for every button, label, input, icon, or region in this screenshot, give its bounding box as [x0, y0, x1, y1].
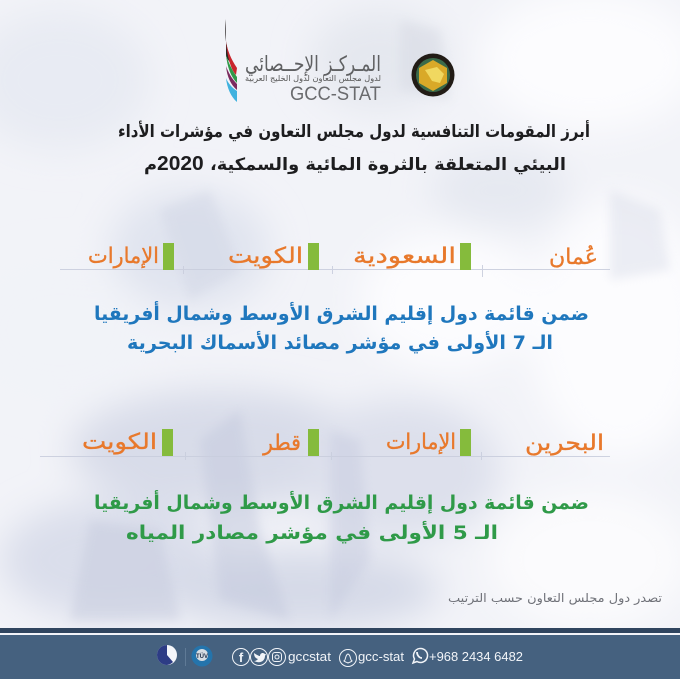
country: Qatar: قطر [262, 431, 301, 456]
handle: gccstat: gccstat [288, 649, 331, 664]
country row: marine fisheries [60, 243, 610, 277]
logo: GCC emblem [412, 54, 454, 96]
handle: gcc-stat: gcc-stat [358, 649, 404, 664]
logo: GCC-STAT wordmark: لدول مجلس التعاون لدول الخليج العربية [245, 74, 381, 83]
country: Kuwait: الكويت [228, 244, 303, 269]
country: UAE: الإمارات [386, 430, 456, 455]
country marker: UAE [163, 243, 174, 270]
icons: facebook twitter instagram: f [239, 650, 244, 665]
logo: GCC-STAT wordmark: GCC-STAT [290, 84, 381, 105]
country marker: UAE [460, 429, 471, 456]
country: UAE: الإمارات [88, 244, 159, 269]
logo: GCC-STAT wordmark [245, 52, 381, 105]
country: Kuwait: الكويت [82, 430, 157, 455]
icon: whatsapp [413, 648, 428, 663]
country marker: Saudi Arabia [460, 243, 471, 270]
country marker: Qatar [308, 429, 319, 456]
country: Bahrain: البحرين [525, 431, 604, 456]
logo: GCC-STAT ribbon mark [225, 19, 237, 102]
title: أبرز المقومات التنافسية لدول مجلس التعاون في مؤشرات الأداء [118, 120, 590, 142]
badge: TUV [192, 646, 212, 666]
text block: water statement [94, 490, 589, 544]
phone number: +968 2434 6482 [429, 649, 523, 664]
note: ranking order: تصدر دول مجلس التعاون حسب الترتيب [448, 591, 662, 606]
country marker: Kuwait [162, 429, 173, 456]
country: Saudi Arabia: السعودية [353, 244, 456, 269]
title [118, 120, 590, 175]
country: Oman: عُمان [549, 245, 598, 270]
title: البيئي المتعلقة بالثروة المائية والسمكية، 2020م [144, 153, 566, 175]
footer bar [0, 628, 680, 679]
icon: snapchat [340, 650, 356, 666]
badge: certification [157, 645, 177, 665]
badge: TUV: TÜV [196, 653, 208, 660]
country marker: Kuwait [308, 243, 319, 270]
text block: fisheries statement [94, 301, 589, 354]
icons: facebook twitter instagram [232, 648, 286, 666]
logo: GCC-STAT wordmark: المـركـز الإحــصائي [245, 52, 381, 76]
text block: fisheries statement: الـ 7 الأولى في مؤشر مصائد الأسماك البحرية [127, 331, 553, 354]
text block: fisheries statement: ضمن قائمة دول إقليم الشرق الأوسط وشمال أفريقيا [94, 301, 589, 325]
country row: water resources [40, 429, 610, 460]
text block: water statement: الـ 5 الأولى في مؤشر مصادر المياه [126, 521, 498, 544]
text block: water statement: ضمن قائمة دول إقليم الشرق الأوسط وشمال أفريقيا [94, 490, 589, 514]
